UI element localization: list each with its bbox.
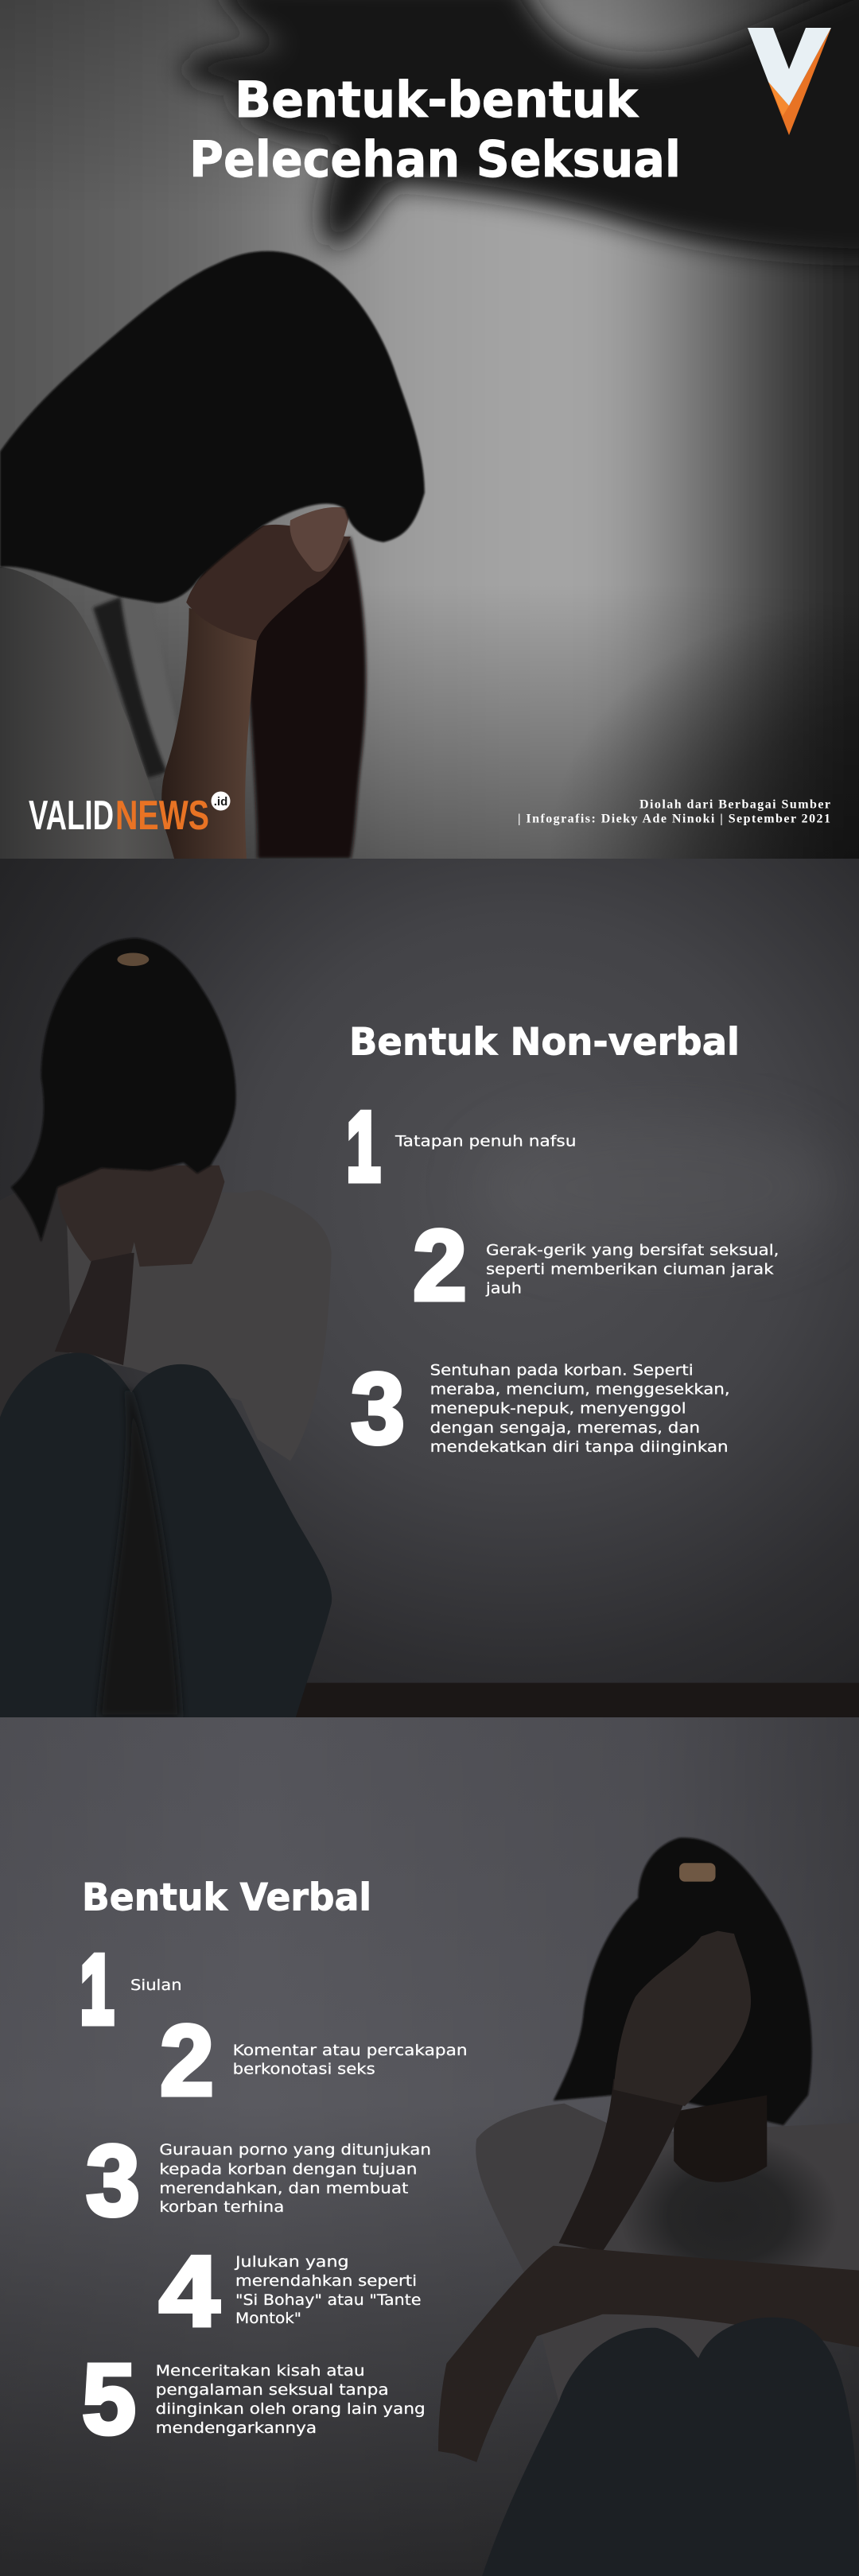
hands (57, 1166, 224, 1267)
shirt (476, 2104, 859, 2402)
lower arm (438, 2246, 859, 2462)
hair behind (247, 537, 366, 859)
hand on face (186, 525, 351, 641)
panel: Bentuk Verbal (0, 1717, 859, 2576)
arm (161, 608, 258, 859)
credits: | Infografis: Dieky Ade Ninoki | September 2021 (518, 813, 830, 825)
hair tie (117, 952, 149, 966)
title: Pelecehan Seksual (189, 130, 681, 188)
item 3: mendekatkan diri tanpa diinginkan (430, 1438, 729, 1456)
item 4: "Si Bohay" atau "Tante (235, 2291, 422, 2309)
item 2: 2 (413, 1209, 467, 1321)
logo: Validnews.id: NEWS (115, 793, 209, 839)
shirt (67, 1216, 331, 1461)
photo: woman with shadow hand (0, 0, 859, 859)
hair (554, 1837, 812, 2125)
item 5: diinginkan oleh orang lain yang (156, 2400, 426, 2418)
face (674, 2095, 767, 2182)
item 2: seperti memberikan ciuman jarak (486, 1261, 774, 1278)
item 3: menepuk-nepuk, menyenggol (430, 1400, 686, 1418)
item 3 (86, 2124, 431, 2237)
item 3: Gurauan porno yang ditunjukan (159, 2141, 431, 2159)
panel: title cover (0, 0, 859, 859)
hair tie (679, 1863, 716, 1882)
item 1: 1 (80, 1935, 114, 2043)
credits: Diolah dari Berbagai Sumber (639, 798, 830, 811)
hair (0, 251, 425, 603)
sweater (0, 567, 174, 859)
item 5: mendengarkannya (156, 2419, 317, 2437)
item 2 (413, 1209, 779, 1321)
item 3: meraba, mencium, menggesekkan, (430, 1381, 730, 1399)
item 3: dengan sengaja, meremas, dan (430, 1419, 700, 1437)
item 1 (80, 1935, 182, 2043)
item 2: Gerak-gerik yang bersifat seksual, (486, 1242, 779, 1259)
item 2: berkonotasi seks (233, 2061, 375, 2078)
item 3: 3 (351, 1352, 405, 1465)
heading: Bentuk Verbal (82, 1876, 371, 1919)
hair (11, 938, 236, 1242)
item 1 (347, 1092, 576, 1201)
item 4: merendahkan seperti (235, 2272, 417, 2290)
icon: V logo (748, 28, 831, 135)
item 3 (351, 1352, 730, 1465)
panel: Bentuk Non-verbal (0, 859, 859, 1717)
item 4: Montok" (235, 2310, 301, 2327)
item 2: Komentar atau percakapan (233, 2042, 468, 2059)
item 4: 4 (159, 2235, 220, 2347)
logo: Validnews.id: .id (214, 795, 227, 809)
jeans (482, 2318, 859, 2576)
item 5: 5 (82, 2343, 136, 2455)
logo: Validnews.id (29, 792, 231, 839)
hand on head (613, 1931, 751, 2106)
item 1: Siulan (130, 1977, 182, 1994)
title: Bentuk-bentuk (235, 71, 639, 129)
hand shadow on wall (181, 0, 859, 258)
item 2: 2 (160, 2004, 214, 2116)
forearm (55, 1253, 134, 1365)
corner falloff (586, 663, 823, 859)
item 3: kepada korban dengan tujuan (159, 2160, 417, 2178)
title (189, 71, 681, 188)
item 4 (159, 2235, 422, 2347)
item 3: 3 (86, 2124, 140, 2237)
photo: woman covering face (0, 859, 859, 1717)
item 1: Tatapan penuh nafsu (395, 1132, 576, 1150)
jeans (0, 1353, 332, 1717)
item 4: Julukan yang (235, 2253, 349, 2271)
raised arm (559, 2079, 685, 2252)
item 5: pengalaman seksual tanpa (156, 2381, 389, 2399)
item 3: Sentuhan pada korban. Seperti (430, 1361, 694, 1379)
item 2 (160, 2004, 468, 2116)
item 3: korban terhina (159, 2198, 284, 2216)
logo: Validnews.id: VALID (29, 793, 114, 839)
item 3: merendahkan, dan membuat (159, 2180, 408, 2198)
item 5 (82, 2343, 426, 2455)
item 1: 1 (347, 1092, 380, 1201)
item 2: jauh (485, 1280, 522, 1298)
credits (518, 798, 830, 825)
heading: Bentuk Non-verbal (349, 1021, 740, 1064)
item 5: Menceritakan kisah atau (156, 2362, 365, 2380)
photo: woman holding head (0, 1717, 859, 2576)
